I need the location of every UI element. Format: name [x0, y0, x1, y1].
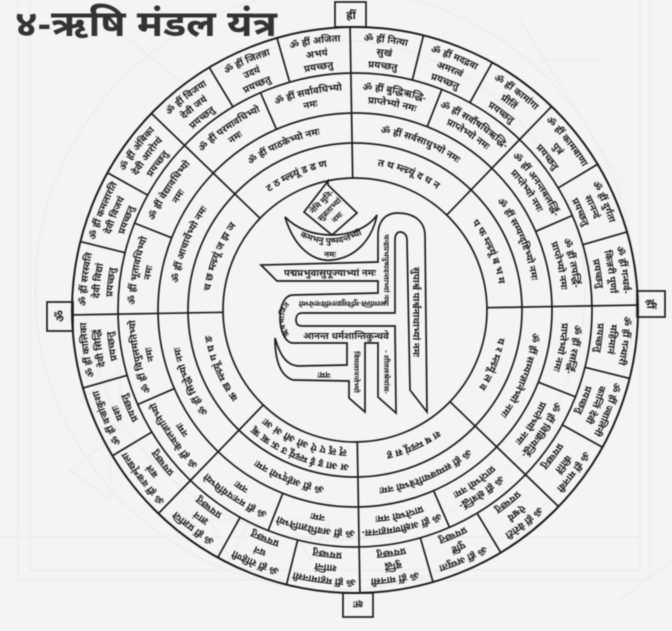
cell: jvalini — [572, 382, 621, 438]
cell: madadrava: प्रयच्छतु — [430, 72, 460, 92]
cell: kalika: देवी सिद्धिं — [89, 327, 108, 369]
cell: vedyavadhi: नमः — [170, 187, 188, 206]
cell: avadhi: ॐ ह्रीं अवधिज्ञानिभ्यो — [274, 513, 357, 543]
cell: ta varga: त थ म्ल्व्र्यूं द ध न — [375, 153, 444, 193]
cell: nitya: ॐ ह्रीं नित्या — [363, 32, 410, 46]
curved bend text: ऋषभाजित — [277, 300, 292, 338]
cell: durgata: ॐ ह्रीं दुर्गता — [593, 181, 616, 223]
cell: sarvavadhi: ॐ ह्रीं सर्वावधिभ्यो — [272, 79, 344, 108]
cell: nitya — [363, 32, 410, 74]
cell: manasi: बुद्धिं — [384, 559, 403, 574]
cell: rohini — [230, 528, 280, 575]
cell: achyuta: प्रयच्छतु — [437, 526, 468, 544]
cell: ambika — [120, 126, 171, 178]
cell: jvalini: ॐ ह्रीं ज्वालिनी — [594, 382, 621, 438]
cell: vowels: लृ ॡ ए ऐ ओ औ अं अः — [257, 414, 350, 466]
cell: kamabana: पुत्रं — [550, 142, 566, 156]
left leg text: विमलानन्तेभ्यो — [352, 351, 361, 394]
second ring: sixteen riddhi cells — [126, 81, 583, 539]
cell: sarasvati: देवी विद्यां — [89, 262, 106, 299]
cell: mahamanasi — [292, 546, 356, 588]
dot square: सुव्रताभ्यां — [315, 195, 344, 224]
cell: kamalarati: देवी विजयं — [100, 193, 128, 236]
cell: gandharva — [592, 246, 633, 294]
cell: anantabala riddhi: ॐ ह्रीं अनन्तबलर्द्धि- — [509, 148, 565, 219]
cell: sarasvati: प्रयच्छतु — [104, 266, 119, 298]
cell: ambika: ॐ ह्रीं अंबिका — [116, 123, 158, 174]
cell: kamalarati: ॐ ह्रीं कमलारति — [85, 178, 121, 242]
cell: manavi: प्रयच्छतु — [539, 442, 564, 470]
cell: tapa riddhi — [550, 238, 583, 290]
cell: gandhari: ॐ ह्रीं गन्धारी — [618, 316, 632, 366]
cell: manahparyaya: नमः — [232, 477, 251, 495]
title: ४-ऋषि मंडल यंत्र — [15, 3, 278, 44]
dot square: नेमि मुनि- — [308, 188, 337, 216]
third ring: eight salutation cells — [165, 119, 548, 503]
cell: ta retroflex varga: ट ठ म्ल्व्र्यूं ड ढ ण — [263, 154, 331, 195]
cell: kalika — [78, 322, 118, 378]
cell: vairoti: प्रयच्छतु — [492, 490, 522, 514]
cell: jvalini: कान्तिं देवी — [585, 386, 606, 425]
cell: rasa riddhi: प्राप्तेभ्यो नमः — [550, 322, 573, 374]
cell: gandharva: ॐ ह्रीं गन्धर्व- — [616, 246, 633, 294]
cell: akshina riddhi: ॐ ह्रीं अक्षीणमहानस- — [360, 510, 444, 543]
yantra concentric rings — [72, 27, 638, 593]
second ring dividers — [118, 73, 592, 547]
cell: manasi — [370, 547, 420, 588]
cell: vijaya — [166, 80, 217, 130]
cell: achyuta — [437, 526, 487, 572]
lower arm text: आनन्त धर्मशान्तिकुन्थवे — [303, 329, 389, 342]
cell: paramavadhi: ॐ ह्रीं परमावधिभ्यो — [194, 101, 263, 155]
cell: madadrava: ॐ ह्रीं मदद्रवा — [430, 45, 480, 70]
cell: manavi: ॐ ह्रीं मानवी — [556, 452, 590, 493]
cell: nitya: प्रयच्छतु — [368, 60, 398, 74]
cell: prajnapti — [172, 494, 222, 544]
central hrim glyph — [261, 181, 427, 413]
cell: pathaka: ॐ ह्रीं पाठकेभ्यो नमः — [243, 121, 324, 168]
cell: vikriya riddhi: प्राप्तेभ्यो नमः — [511, 399, 551, 449]
cell: kamanga: प्रीतिं — [500, 94, 520, 110]
cell: sarasvati: ॐ ह्रीं सरस्वति — [76, 250, 95, 307]
cell: sarvavadhi — [272, 79, 346, 118]
cell: rasa riddhi: ॐ ह्रीं रसर्द्धि- — [563, 323, 585, 376]
cell: vijaya: प्रयच्छतु — [187, 104, 218, 132]
cell: vowels — [245, 411, 357, 481]
cell: kalika: ॐ ह्रीं कालिका — [76, 321, 97, 379]
cell: rasa riddhi — [553, 322, 582, 374]
cell: rohini: धनं — [251, 543, 268, 559]
cell: akshina riddhi: प्राप्तेभ्यो नमः — [373, 503, 425, 528]
cell: rohini: प्रयच्छतु — [248, 527, 281, 549]
cell: ajita: अभयं — [305, 46, 330, 62]
cell: achyuta: ॐ ह्रीं अच्युता — [438, 546, 487, 572]
cell: vikriya riddhi: ॐ ह्रीं विक्रियर्द्धि- — [518, 399, 565, 461]
cell: manahparyaya: ॐ ह्रीं मनःपर्ययिभ्यो — [200, 470, 271, 523]
cell: manasi: प्रयच्छतु — [376, 547, 407, 559]
cell: paramavadhi: नमः — [226, 129, 245, 147]
cell: mahamanasi: ॐ ह्रीं महामानसी — [292, 572, 356, 588]
cell: sarvaushadhi riddhi: प्राप्तेभ्यो नमः — [444, 114, 494, 154]
cell: vipulamati: नमः — [143, 345, 157, 363]
cell: vijaya: देवी जयं — [177, 92, 211, 122]
cell: jitanna — [224, 48, 273, 94]
crescent — [285, 215, 377, 260]
cell: vairoti — [492, 490, 542, 540]
cell: arhat: ॐ ह्रीं अर्हद्भ्यो नमः — [250, 456, 327, 499]
cell: cha varga: च छ म्ल्व्र्यूं ज झ ञ — [197, 218, 240, 294]
cell: acharya: ॐ ह्रीं आचार्येभ्यो नमः — [165, 202, 211, 286]
crescent text: कमभनु पुष्पदन्तेभ्यो — [299, 227, 364, 247]
cell: kshetra riddhi: प्राप्तेभ्यो नमः — [449, 462, 499, 503]
cell: manavi: कीर्तिं — [554, 455, 572, 476]
cell: vajrankusha: ॐ ह्रीं वज्रांकुशा — [88, 388, 124, 448]
cell: kamalarati: प्रयच्छतु — [116, 203, 138, 236]
outer ring: twenty-four goddess cells — [77, 32, 633, 588]
cell: mahamanasi: प्रयच्छतु — [312, 546, 342, 560]
cell: buddhi riddhi: प्राप्तेभ्यो नमः — [367, 92, 419, 115]
cell: sarvavadhi: नमः — [302, 98, 320, 112]
cell: avadhi: नमः — [309, 509, 326, 523]
cell: paramavadhi — [194, 101, 269, 163]
cell: ajita: प्रयच्छतु — [303, 59, 335, 75]
inner column text: चन्द्रप्रभपुष्पदन्ताभ्यां नमः — [381, 234, 392, 306]
cell: bhutavadhi: नमः — [142, 264, 156, 281]
cell: prajnapti: ॐ ह्रीं प्रज्ञप्ति — [169, 508, 217, 548]
cell: anantabala riddhi: प्राप्तेभ्यो नमः — [507, 166, 548, 216]
cell: siddha: ॐ ह्रीं सिद्धेभ्यो नमः — [166, 344, 212, 420]
cell: ka varga: क ख म्ल्व्र्यूं ग घ ङ — [198, 331, 242, 405]
cell: gandhari: प्रयच्छतु — [591, 322, 604, 354]
cell: madadrava: अमरत्वं — [436, 62, 464, 78]
cell: samyagdarshana: ॐ ह्रीं सम्यग्दृष्टिभ्यो नमः — [493, 193, 546, 284]
upper arm text: अरमल्लि-मुनिसुव्रतनमिनाथेभ्यो — [298, 298, 387, 308]
cell: vipulamati: ॐ ह्रीं विपुलमतिभ्यो — [123, 318, 154, 396]
bottom box — [343, 593, 373, 617]
cell: vajrashrinkhala: बलं — [143, 462, 161, 480]
cell: samyagjnana: ॐ ह्रीं सम्यग्ज्ञानेभ्यो नमः — [496, 329, 548, 423]
cell: vairoti: ऐश्वर्यं — [506, 506, 526, 524]
cell: buddhi riddhi: ॐ ह्रीं बुद्धिऋद्धि- — [361, 79, 428, 105]
cell: achyuta: पुष्टिं — [450, 540, 467, 556]
cell: durgata — [571, 181, 616, 228]
cell: jitanna: प्रयच्छतु — [241, 73, 274, 96]
inner ring dividers — [158, 113, 552, 507]
cell: sarvasadhu: ॐ ह्रीं सर्वसाधुभ्यो नमः — [377, 119, 465, 167]
cell: samyakcharitra: ॐ ह्रीं सम्यक्चारित्रेभ्यो नमः — [375, 445, 477, 503]
cell: ambika: देवी आरोग्यं — [128, 133, 166, 178]
cell: jitanna: ॐ ह्रीं जितन्ना — [221, 45, 272, 77]
cell: kamalarati — [88, 180, 138, 240]
cell: kamanga: प्रयच्छतु — [488, 100, 516, 126]
cell: ambika: प्रयच्छतु — [144, 148, 172, 180]
fourth ring: eight syllable cells — [197, 153, 511, 481]
cell: pa varga: प फ म्ल्व्र्यूं ब भ म — [468, 216, 511, 287]
cell: nitya: सुखं — [376, 48, 394, 59]
cell: gandhari: महिमानं — [606, 324, 620, 356]
cell: durgata: प्रयच्छतु — [571, 196, 590, 228]
cell: vairoti: ॐ ह्रीं वैरोटी — [504, 507, 542, 540]
bottom box: क्षः — [352, 598, 363, 609]
cell: jitanna: उदयं — [241, 63, 263, 82]
cell: jvalini: प्रयच्छतु — [572, 385, 592, 416]
middle leg text: - शीतलश्रेयांस- — [382, 350, 392, 394]
right box — [637, 291, 665, 317]
cell: kshetra riddhi: ॐ ह्रीं क्षेत्रर्द्धि- — [456, 472, 508, 514]
cell: durgata: सानन्दं — [585, 194, 602, 220]
right box: ह्रीं — [644, 299, 657, 310]
cell: gandharva: प्रयच्छतु — [592, 258, 604, 290]
cell: kamabana: प्रयच्छतु — [536, 143, 560, 172]
cell: kalika: प्रयच्छतु — [104, 330, 120, 362]
cell: ya varga: य र म्ल्व्र्यूं ल व — [475, 335, 510, 394]
cell: manavi — [539, 442, 590, 493]
cell: kamabana: ॐ ह्रीं कामबाणा — [546, 116, 588, 167]
cell: manasi: ॐ ह्रीं मानसी — [370, 572, 420, 588]
cell: sarasvati — [77, 251, 119, 306]
cell: vajrankusha: प्रयच्छतु — [118, 391, 141, 424]
cell: gandharva: किन्नरी पूर्णां — [604, 249, 620, 294]
cell: kamanga — [488, 74, 540, 126]
cell: kevala: नमः — [174, 420, 192, 439]
cell: mahamanasi: शान्तिं — [314, 562, 338, 574]
dot square — [304, 181, 357, 235]
left box — [47, 302, 73, 331]
glyph outline — [261, 213, 427, 413]
cell: sha varga: श ष म्ल्व्र्यूं स ह — [383, 427, 444, 464]
cell: vajrankusha — [92, 390, 139, 446]
outer ring dividers — [72, 27, 638, 593]
cell: rohini: ॐ ह्रीं रोहिणी — [230, 550, 280, 575]
cell: vedyavadhi: ॐ ह्रीं वेद्यावधिभ्यो — [143, 156, 194, 223]
cell: ajita — [289, 33, 341, 73]
top box — [335, 2, 366, 27]
crescent text: नमः — [324, 250, 336, 259]
cell: vajrashrinkhala: प्रयच्छतु — [149, 447, 177, 478]
cell: vajrashrinkhala: ॐ ह्रीं वज्रशृंखला — [117, 449, 168, 508]
cell: vowels: अ आ इ ई म्ल्व्र्यूं उ ऊ ऋ ॠ — [245, 422, 353, 481]
cell: kevala: ॐ ह्रीं केवलज्ञानिभ्यो — [143, 399, 202, 473]
cell: sarvaushadhi riddhi: ॐ ह्रीं सर्वौषधिऋद्धि- — [437, 96, 513, 152]
cell: gandhari — [591, 316, 632, 366]
cell: tapa riddhi: प्राप्तेभ्यो नमः — [548, 240, 573, 292]
dot square: नमः — [330, 210, 345, 225]
cell: ajita: ॐ ह्रीं अजिता — [288, 31, 342, 52]
top box: ह्रीं — [346, 9, 357, 22]
cell: bhutavadhi: ॐ ह्रीं भूतावधिभ्यो — [124, 234, 150, 307]
cell: madadrava — [430, 45, 480, 92]
lower tail text: नमः — [318, 370, 330, 380]
cell: prajnapti: ज्ञानं — [190, 508, 211, 528]
cell: prajnapti: प्रयच्छतु — [193, 493, 225, 521]
cell: vijaya: ॐ ह्रीं विजया — [162, 77, 210, 118]
cell: kamanga: ॐ ह्रीं कामांगा — [494, 74, 540, 110]
cell: tapa riddhi: ॐ ह्रीं तपर्द्धि- — [560, 236, 584, 289]
top bar text: पद्मप्रभुवासुपूज्याभ्यां नमः — [284, 267, 377, 279]
right column text: सुपार्श्व पार्श्वनाथाभ्यां नमः — [410, 267, 422, 358]
crescent text — [299, 227, 364, 259]
left box: ॐ — [52, 310, 67, 322]
cell: vajrankusha: यशः — [109, 403, 126, 423]
